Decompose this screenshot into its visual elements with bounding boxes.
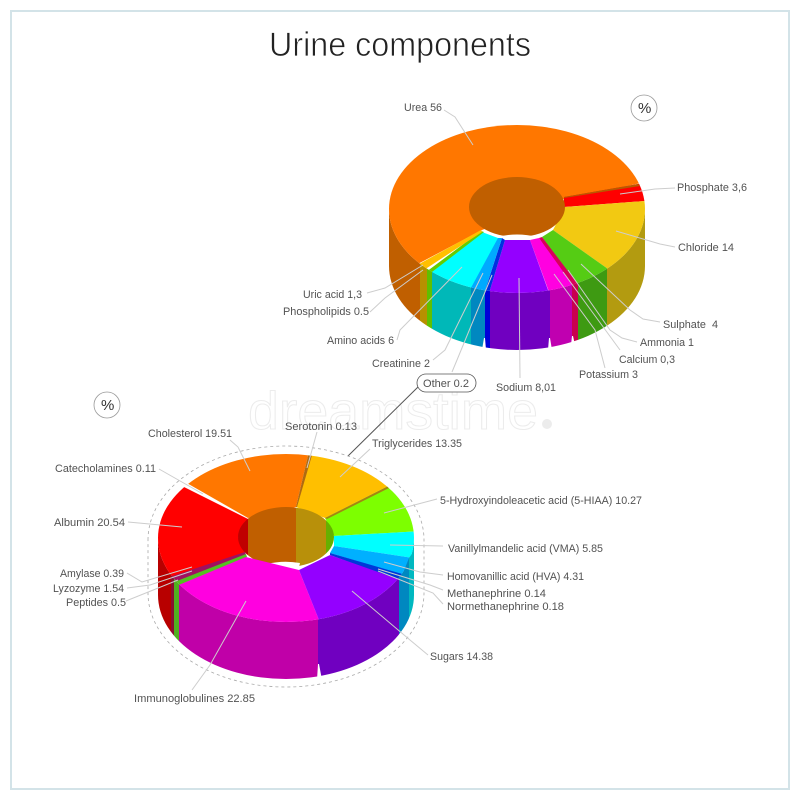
slice: VMA bbox=[334, 532, 414, 558]
labels: lower chart: Triglycerides 13.35 bbox=[372, 438, 462, 450]
icon: percent badge top bbox=[631, 95, 657, 121]
labels: lower chart: Immunoglobulines 22.85 bbox=[134, 693, 255, 705]
hole gap bbox=[267, 562, 300, 571]
slice: amino acids bbox=[432, 232, 498, 288]
labels: lower chart: Lyzozyme 1.54 bbox=[53, 583, 124, 595]
slice: immunoglobulines bbox=[180, 557, 319, 622]
labels: lower chart: Homovanillic acid (HVA) 4.31 bbox=[447, 571, 584, 583]
callout: other 0.2 bbox=[417, 374, 476, 392]
labels: lower chart: 5-Hydroxyindoleacetic acid (5-HIAA) 10.27 bbox=[440, 495, 642, 507]
labels: lower chart: Cholesterol 19.51 bbox=[148, 428, 232, 440]
slice: sugars bbox=[299, 555, 398, 620]
slice: other bbox=[485, 238, 505, 291]
slice: sulphate bbox=[542, 230, 608, 284]
labels: top chart: Calcium 0,3 bbox=[619, 354, 675, 366]
top surface: front slices bbox=[420, 230, 608, 293]
slice: potassium bbox=[530, 238, 572, 290]
lower chart leader lines bbox=[126, 432, 443, 690]
labels: top chart: Phospholipids 0.5 bbox=[283, 306, 369, 318]
labels: top chart bbox=[283, 102, 747, 394]
labels: lower chart: Normethanephrine 0.18 bbox=[447, 601, 564, 613]
slice: phospholipids bbox=[429, 231, 484, 272]
labels: top chart: Chloride 14 bbox=[678, 242, 734, 254]
labels: top chart: Sulphate 4 bbox=[663, 319, 718, 331]
connector: other to lower chart bbox=[348, 387, 418, 456]
inner hole bbox=[238, 507, 334, 566]
wall notches bbox=[482, 336, 575, 350]
labels: lower chart: Catecholamines 0.11 bbox=[55, 463, 156, 475]
labels: lower chart: Peptides 0.5 bbox=[66, 597, 126, 609]
inner hole bbox=[469, 177, 565, 237]
top surface: front slices bbox=[172, 552, 398, 622]
top chart leader lines bbox=[367, 110, 675, 378]
icon: percent badge top: % bbox=[638, 100, 651, 117]
slice: uric acid bbox=[420, 230, 482, 268]
labels: top chart: Phosphate 3,6 bbox=[677, 182, 747, 194]
slice: peptides bbox=[176, 554, 247, 585]
slice: triglycerides bbox=[296, 456, 387, 518]
labels: lower chart: Albumin 20.54 bbox=[54, 517, 125, 529]
labels: lower chart: Serotonin 0.13 bbox=[285, 421, 357, 433]
panel: lower donut chart bbox=[158, 454, 414, 679]
labels: lower chart: Methanephrine 0.14 bbox=[447, 588, 546, 600]
slice: creatinine bbox=[470, 238, 502, 290]
labels: top chart: Ammonia 1 bbox=[640, 337, 694, 349]
labels: top chart: Potassium 3 bbox=[579, 369, 638, 381]
icon: percent badge lower bbox=[94, 392, 120, 418]
sides: top chart outer wall bbox=[389, 212, 645, 350]
labels: lower chart bbox=[53, 421, 642, 705]
slice: sodium bbox=[490, 240, 548, 293]
slice: serotonin bbox=[296, 455, 312, 507]
title: Urine components bbox=[269, 26, 531, 64]
slice: amylase and lyzozyme bbox=[172, 552, 246, 582]
labels: top chart: Creatinine 2 bbox=[372, 358, 430, 370]
wall corner: vma and hva bbox=[401, 551, 414, 578]
slice: ammonia bbox=[539, 237, 577, 286]
slice: albumin bbox=[158, 487, 248, 577]
labels: lower chart: Amylase 0.39 bbox=[60, 568, 124, 580]
labels: top chart: Amino acids 6 bbox=[327, 335, 394, 347]
wall notch bbox=[317, 664, 322, 680]
icon: percent badge lower: % bbox=[101, 397, 114, 414]
top surface: back slices bbox=[158, 454, 414, 580]
sides: lower chart outer wall bbox=[158, 540, 414, 679]
top surface: back slices bbox=[389, 125, 645, 268]
callout: other 0.2: Other 0.2 bbox=[423, 378, 469, 390]
slice: cholesterol bbox=[188, 454, 308, 518]
hole gap bbox=[497, 234, 537, 241]
slice: catecholamines bbox=[325, 486, 389, 519]
dashed outline around lower chart bbox=[148, 446, 424, 687]
slice: methanephrine and normethanephrine bbox=[330, 553, 402, 580]
slice: 5-HIAA bbox=[325, 486, 414, 536]
panel: top donut chart bbox=[389, 125, 645, 350]
labels: top chart: Uric acid 1,3 bbox=[303, 289, 362, 301]
slice: HVA bbox=[330, 546, 410, 574]
labels: lower chart: Vanillylmandelic acid (VMA) 5.85 bbox=[448, 543, 603, 555]
labels: top chart: Sodium 8,01 bbox=[496, 382, 556, 394]
labels: lower chart: Sugars 14.38 bbox=[430, 651, 493, 663]
labels: top chart: Urea 56 bbox=[404, 102, 442, 114]
watermark: dreamstime bbox=[248, 382, 538, 441]
